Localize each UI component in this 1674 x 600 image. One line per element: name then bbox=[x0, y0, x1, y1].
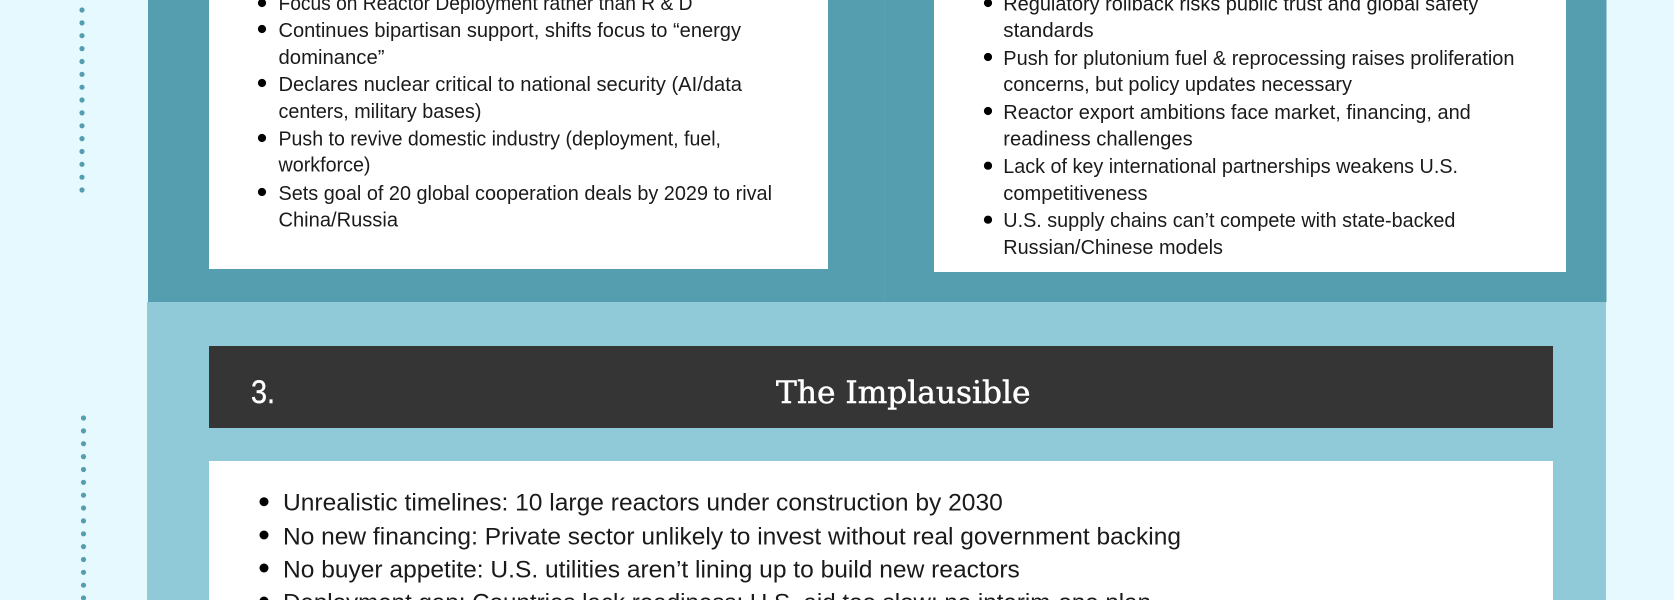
right bullet list: Lack of key international partnerships weakens U.S. bbox=[1003, 155, 1458, 178]
panel: top teal band bbox=[148, 0, 1606, 302]
section title: The Implausible bbox=[776, 375, 1030, 411]
left bullet list: workforce) bbox=[278, 154, 370, 177]
section number: 3. bbox=[251, 374, 275, 410]
left white text card bbox=[209, 0, 828, 269]
panel: section 3 The Implausible bbox=[147, 302, 1606, 600]
dotted line: lower left bbox=[81, 415, 86, 600]
white text card bbox=[209, 461, 1553, 600]
bullet list: No new financing: Private sector unlikely to invest without real government backing bbox=[283, 524, 1181, 550]
right bullet list: Reactor export ambitions face market, financing, and bbox=[1003, 101, 1471, 124]
right bullet list: standards bbox=[1003, 19, 1094, 42]
left bullet list: Continues bipartisan support, shifts focus to “energy bbox=[278, 19, 742, 42]
right bullet list: Push for plutonium fuel & reprocessing raises proliferation bbox=[1003, 47, 1514, 70]
bullet list: No buyer appetite: U.S. utilities aren’t lining up to build new reactors bbox=[283, 557, 1020, 584]
dotted line: upper left bbox=[79, 7, 85, 193]
right bullet list bbox=[984, 0, 1514, 259]
right white text card bbox=[934, 0, 1566, 272]
bullet list bbox=[260, 490, 1181, 600]
heading bar bbox=[209, 346, 1553, 428]
left bullet list: Push to revive domestic industry (deployment, fuel, bbox=[278, 128, 721, 151]
left bullet list: centers, military bases) bbox=[278, 100, 482, 123]
left bullet list: dominance” bbox=[278, 46, 385, 69]
left bullet list: Sets goal of 20 global cooperation deals by 2029 to rival bbox=[278, 182, 772, 205]
right bullet list: competitiveness bbox=[1003, 182, 1148, 205]
right bullet list: concerns, but policy updates necessary bbox=[1003, 73, 1353, 96]
right bullet list: readiness challenges bbox=[1003, 128, 1193, 151]
left bullet list bbox=[258, 0, 772, 232]
left bullet list: Declares nuclear critical to national security (AI/data bbox=[278, 73, 743, 96]
right bullet list: Russian/Chinese models bbox=[1003, 236, 1223, 259]
left bullet list: China/Russia bbox=[278, 209, 399, 232]
bullet list: Unrealistic timelines: 10 large reactors under construction by 2030 bbox=[283, 490, 1003, 517]
right bullet list: U.S. supply chains can’t compete with state-backed bbox=[1003, 209, 1455, 232]
